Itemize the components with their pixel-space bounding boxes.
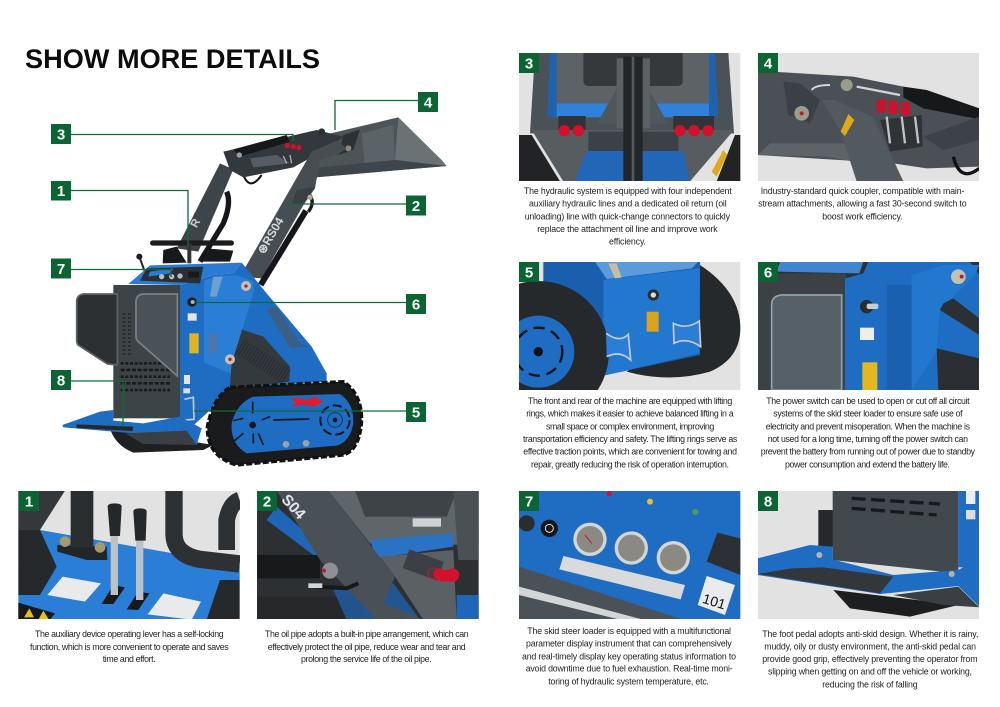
photo: power switch xyxy=(758,262,979,390)
callout badge 5: 5 xyxy=(412,404,420,422)
description 7: avoid downtime due to fuel exhaustion. Real-time moni- xyxy=(526,664,733,674)
description 3: auxiliary hydraulic lines and a dedicated oil return (oil xyxy=(529,199,727,209)
main blue body xyxy=(128,263,327,428)
arm pivot plate xyxy=(204,275,253,373)
panel: detail 7 instrument display xyxy=(519,491,740,686)
badge 4: 4 xyxy=(764,56,773,72)
lift cylinder xyxy=(233,195,313,348)
description 8: reducing the risk of falling xyxy=(822,679,918,689)
control panel with gauges xyxy=(140,267,203,283)
badge 7 xyxy=(519,491,539,511)
description 8: provide good grip, effectively preventing the operator from xyxy=(762,654,978,664)
callout badge 3: 3 xyxy=(57,126,65,144)
description 7: parameter display instrument that can comprehensively xyxy=(526,639,732,649)
red quick couplers xyxy=(285,143,302,150)
description 3: replace the attachment oil line and improve work xyxy=(537,224,718,234)
description 5: repair, greatly reducing the risk of operation interruption. xyxy=(531,459,729,469)
operator controls xyxy=(136,240,234,277)
photo: quick coupler xyxy=(758,53,979,181)
badge 6 xyxy=(758,262,778,282)
photo: hydraulic lines xyxy=(519,50,740,181)
description 8: muddy, oily or dusty environment, the anti-skid pedal can xyxy=(764,642,976,652)
badge 5 xyxy=(519,262,539,282)
description 4: stream attachments, allowing a fast 30-second switch to xyxy=(758,199,967,209)
badge 3 xyxy=(519,53,539,73)
description 2: prolong the service life of the oil pipe. xyxy=(301,654,432,664)
photo: operating levers xyxy=(18,491,240,620)
description 2: effectively protect the oil pipe, reduce wear and tear and xyxy=(268,642,466,652)
photo: oil pipe: S04 xyxy=(278,491,309,523)
description 1: The auxiliary device operating lever has a self-locking xyxy=(35,629,224,639)
callout badge 5 xyxy=(406,402,426,422)
callout badge 6: 6 xyxy=(412,296,420,314)
foot pedal xyxy=(62,410,202,445)
front loader arm xyxy=(240,141,347,278)
description 7: and real-timely display key operating status information to xyxy=(522,651,736,661)
description 6: power consumption and extend the battery life. xyxy=(785,459,950,469)
description 7: The skid steer loader is equipped with a multifunctional xyxy=(527,626,731,636)
callout badge 7: 7 xyxy=(57,261,65,278)
panel: detail 4 quick coupler xyxy=(758,53,979,221)
description 6: not used for a long time, turning off the power switch can xyxy=(768,434,968,444)
description 6: electricity and prevent misoperation. When the machine is xyxy=(766,421,971,431)
front loader arm: ⊛RS04 xyxy=(254,215,287,256)
callout badge 8: 8 xyxy=(57,372,65,390)
photo: foot pedal xyxy=(758,491,979,619)
main crawler track xyxy=(207,382,362,465)
callout badge 7 xyxy=(51,258,71,278)
callout badge 6 xyxy=(406,294,426,314)
panel: detail 1 operating lever xyxy=(18,491,240,664)
callout badge 1: 1 xyxy=(57,183,65,200)
title: SHOW MORE DETAILS xyxy=(25,44,320,74)
top crossbar with cylinders xyxy=(223,128,351,177)
rear engine cover xyxy=(113,285,180,418)
panel: detail 2 oil pipe xyxy=(257,491,479,664)
callout badge 3 xyxy=(51,124,71,144)
badge 6: 6 xyxy=(764,264,772,282)
description 3: unloading) line with quick-change connectors to quickly xyxy=(525,211,731,221)
rear door panels xyxy=(77,294,177,376)
bucket xyxy=(315,117,447,177)
badge 2 xyxy=(257,491,277,511)
description 7: toring of hydraulic system temperature, etc. xyxy=(548,676,709,686)
badge 1 xyxy=(19,491,39,511)
panel: detail 5 lifting rings xyxy=(519,262,740,470)
badge 8: 8 xyxy=(764,494,772,510)
badge 8 xyxy=(758,491,778,511)
callout badge 4 xyxy=(418,92,438,112)
badge 7: 7 xyxy=(525,494,533,510)
callout badge 2 xyxy=(406,196,426,216)
badge 3: 3 xyxy=(525,56,533,72)
description 2: The oil pipe adopts a built-in pipe arrangement, which can xyxy=(265,629,469,639)
power switch and stickers xyxy=(183,297,199,420)
description 3: The hydraulic system is equipped with four independent xyxy=(524,186,732,196)
description 5: transportation efficiency and safety. The lifting rings serve as xyxy=(523,434,738,444)
hydraulic hose loop xyxy=(243,175,262,183)
badge 2: 2 xyxy=(263,494,271,510)
photo: lifting rings xyxy=(519,262,740,390)
description 6: prevent the battery from running out of power due to standby xyxy=(761,447,976,457)
callout badge 2: 2 xyxy=(412,198,420,215)
description 8: slipping when getting on and off the vehicle or working, xyxy=(768,667,972,677)
description 5: effective traction points, which are convenient for towing and xyxy=(523,447,737,457)
description 8: The foot pedal adopts anti-skid design. Whether it is rainy, xyxy=(762,629,978,639)
callout badge 8 xyxy=(51,370,71,390)
description 4: boost work efficiency. xyxy=(822,211,903,221)
panel: detail 3 hydraulic system xyxy=(519,50,740,247)
callout lines xyxy=(71,100,418,427)
badge 5: 5 xyxy=(525,264,533,282)
description 6: systems of the skid steer loader to ensure safe use of xyxy=(773,409,963,419)
panel: detail 8 foot pedal xyxy=(758,491,979,689)
description 3: efficiency. xyxy=(609,237,646,247)
badge 1: 1 xyxy=(25,494,33,510)
description 4: Industry-standard quick coupler, compatible with main- xyxy=(761,186,964,196)
description 5: The front and rear of the machine are equipped with lifting xyxy=(528,396,732,406)
machine illustration: mini skid steer loader xyxy=(62,117,447,465)
badge 4 xyxy=(758,53,778,73)
description 5: rings, which makes it easier to achieve balanced lifting in a xyxy=(526,409,734,419)
callout badge 4: 4 xyxy=(424,94,433,112)
description 1: function, which is more convenient to operate and saves xyxy=(30,642,229,652)
rear loader arm xyxy=(177,163,233,262)
photo: oil pipe xyxy=(257,491,479,620)
rear track xyxy=(110,428,213,453)
callout badge 1 xyxy=(51,181,71,200)
panel: detail 6 power switch xyxy=(758,262,979,469)
photo: instrument panel xyxy=(519,491,740,620)
photo: instrument panel: 101 xyxy=(701,590,728,612)
red direction arrow xyxy=(291,397,323,408)
description 6: The power switch can be used to open or cut off all circuit xyxy=(766,396,970,406)
description 1: time and effort. xyxy=(103,654,156,664)
description 5: small space or complex environment, improving xyxy=(546,421,714,431)
rear loader arm: R xyxy=(189,217,203,230)
